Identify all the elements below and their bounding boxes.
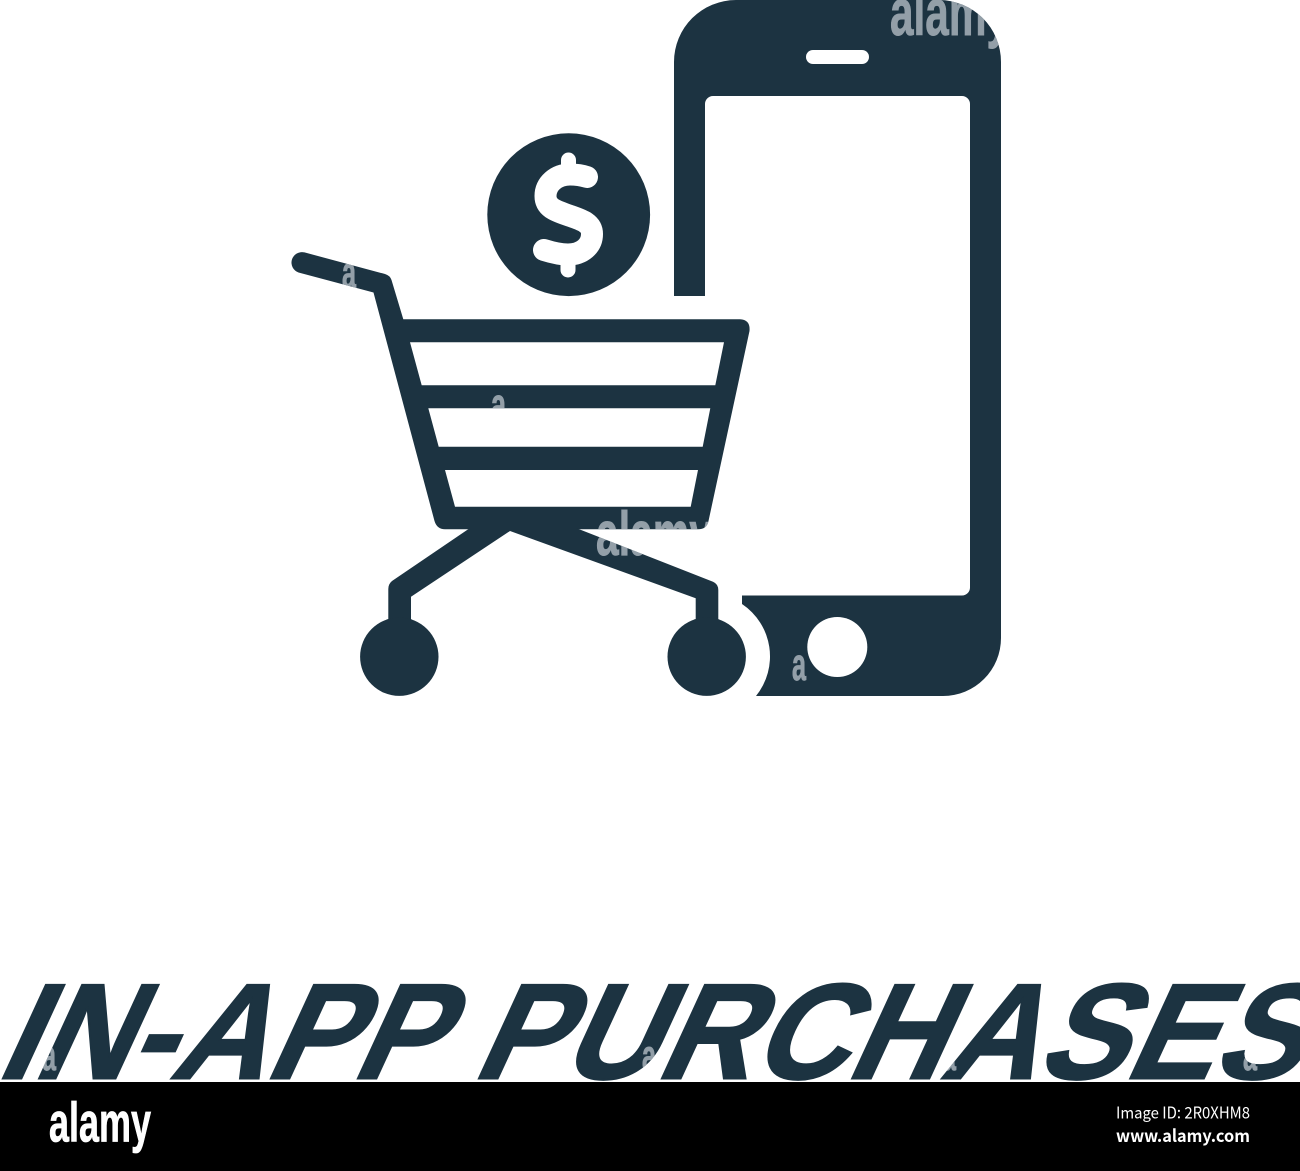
watermark: alamy fragments over dark shapes: a <box>491 379 507 430</box>
watermark: alamy fragments over dark shapes: a <box>642 1032 657 1080</box>
icon: shopping cart <box>291 252 750 696</box>
watermark: alamy fragments over dark shapes: a <box>42 1032 57 1080</box>
footer bar <box>0 1082 1300 1171</box>
cart legs <box>388 528 718 625</box>
watermark: alamy fragments over dark shapes: a <box>942 1032 957 1080</box>
title <box>0 957 1300 1108</box>
watermark: alamy fragments over dark shapes: a <box>1243 1032 1258 1080</box>
right wheel <box>668 618 746 696</box>
watermark: alamy fragments over dark shapes: alamy <box>596 500 712 569</box>
left wheel <box>360 618 438 696</box>
footer image id: Image ID: 2R0XHM8 <box>1116 1100 1250 1124</box>
watermark: alamy fragments over dark shapes: a <box>342 247 357 298</box>
watermark: alamy fragments over dark shapes: a <box>792 639 807 690</box>
icon: dollar coin <box>487 133 650 296</box>
cart basket and handle <box>291 252 750 529</box>
icon: smartphone <box>674 0 1001 696</box>
footer logo: alamy <box>49 1090 151 1154</box>
footer website: www.alamy.com <box>1116 1122 1250 1147</box>
